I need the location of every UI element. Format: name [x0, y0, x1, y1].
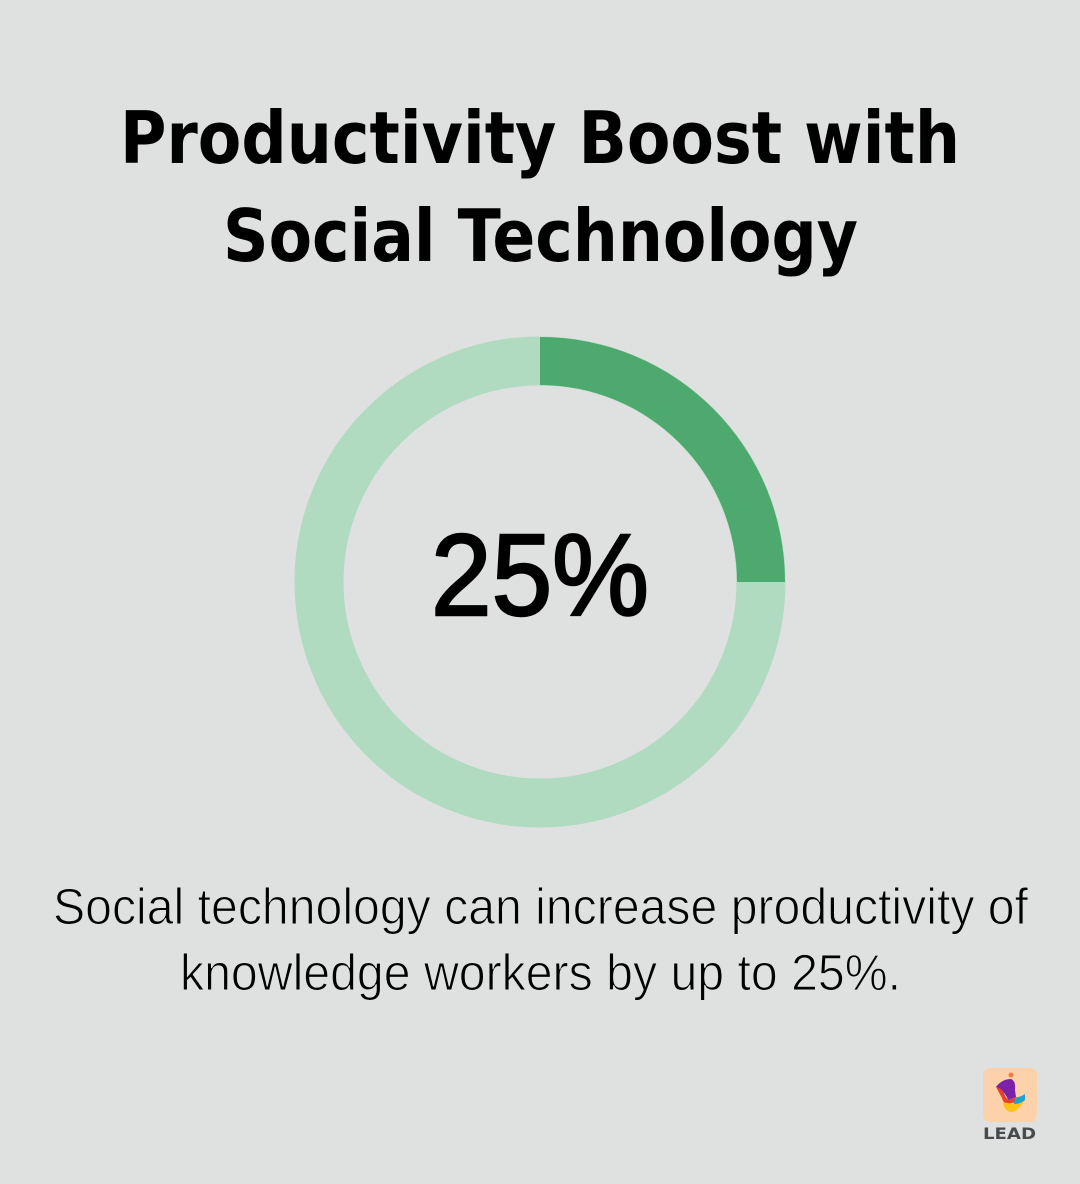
logo wordmark: LEAD [983, 1124, 1036, 1143]
title: Productivity Boost with [120, 96, 960, 180]
description: Social technology can increase productivity of [53, 878, 1029, 935]
description: knowledge workers by up to 25%. [180, 944, 901, 1001]
title [120, 96, 960, 278]
logo [983, 1068, 1037, 1143]
donut chart [319, 337, 785, 803]
description [53, 878, 1029, 1001]
title: Social Technology [223, 194, 858, 278]
center value: 25% [431, 510, 649, 640]
